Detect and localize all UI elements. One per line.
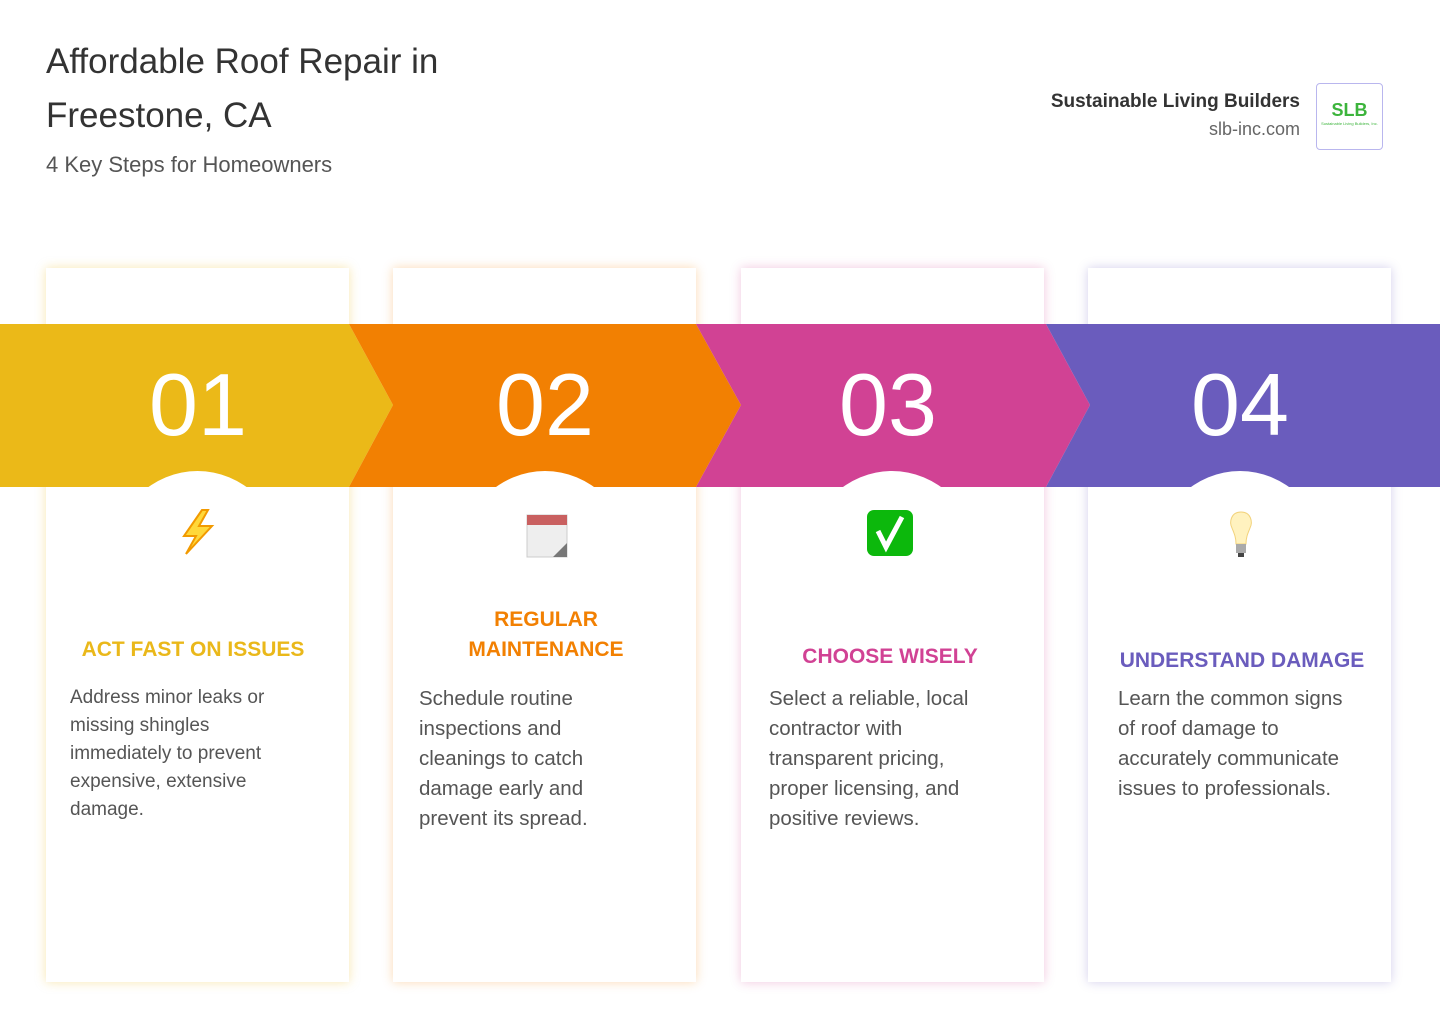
number 01: 01 xyxy=(149,355,247,454)
heading 2: REGULAR xyxy=(494,608,598,631)
card 4 xyxy=(1088,268,1391,982)
logo: Sustainable Living Builders, Inc. xyxy=(1321,121,1378,126)
number 02: 02 xyxy=(496,355,594,454)
arrow band xyxy=(0,324,1440,487)
icon: lightning xyxy=(182,509,214,555)
arrow segment 3 xyxy=(696,324,1090,487)
heading 4: UNDERSTAND DAMAGE xyxy=(1120,649,1364,672)
icon: light bulb xyxy=(1230,512,1252,557)
body 4: Learn the common signs of roof damage to accurately communicate issues to professionals. xyxy=(1118,687,1342,800)
body 3: Select a reliable, local contractor with transparent pricing, proper licensing, and positive reviews. xyxy=(769,687,968,830)
title: Affordable Roof Repair in xyxy=(46,42,438,81)
subtitle: 4 Key Steps for Homeowners xyxy=(46,152,332,177)
card 1 xyxy=(46,268,349,982)
logo: SLB xyxy=(1332,100,1368,120)
heading 1: ACT FAST ON ISSUES xyxy=(82,638,304,661)
arrow segment 2 xyxy=(349,324,741,487)
body 1: Address minor leaks or missing shingles immediately to prevent expensive, extensive damage. xyxy=(70,687,264,820)
heading 2 xyxy=(468,608,624,661)
logo xyxy=(1316,83,1383,150)
number 04: 04 xyxy=(1191,355,1289,454)
brand block xyxy=(1051,83,1383,150)
arrow segment 1 xyxy=(0,324,393,487)
icon: check mark xyxy=(867,510,913,556)
heading 3: CHOOSE WISELY xyxy=(802,645,978,668)
brand url: slb-inc.com xyxy=(1209,119,1300,139)
number 03: 03 xyxy=(839,355,937,454)
arrow segment 4 xyxy=(1046,324,1440,487)
title: Freestone, CA xyxy=(46,96,272,135)
brand name: Sustainable Living Builders xyxy=(1051,91,1300,112)
heading 2: MAINTENANCE xyxy=(468,638,624,661)
icon: calendar xyxy=(526,514,568,558)
body 2: Schedule routine inspections and cleanings to catch damage early and prevent its spread. xyxy=(419,687,588,830)
card 2 xyxy=(393,268,696,982)
card 3 xyxy=(741,268,1044,982)
title xyxy=(46,42,438,135)
